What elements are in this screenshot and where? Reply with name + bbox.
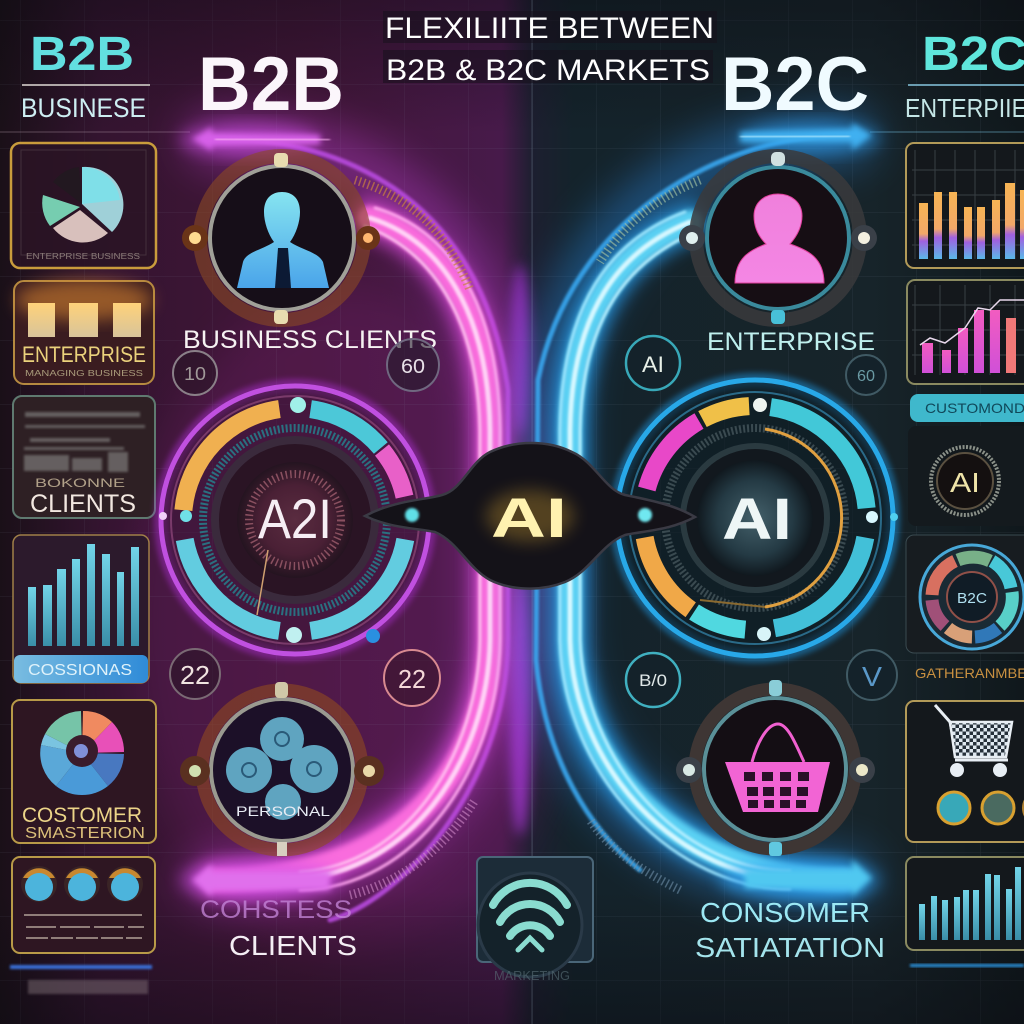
icons: four client circles: [226, 717, 338, 820]
badge: left bottom b: 22: [398, 664, 426, 694]
panel: thin bar chart: [906, 857, 1024, 950]
ring: basket: [676, 680, 875, 856]
badge: right top b: 60: [857, 368, 875, 385]
bottom-left streaks: [10, 965, 152, 994]
icon: pink basket: [725, 724, 830, 812]
icon: pink person: [735, 194, 824, 283]
ring: B2C AI gauge: [617, 380, 898, 656]
badge: left bottom a: [170, 649, 220, 699]
panel: AI badge: AI: [950, 467, 980, 498]
heading: B2B: B2B: [198, 42, 344, 127]
badge: right bottom b: V: [862, 661, 882, 692]
panel: enterprise cards: ENTERPRISE: [22, 342, 146, 367]
panel: bar chart: [13, 535, 149, 683]
badge: right top a: [626, 336, 680, 390]
panel: three indicators: [12, 857, 155, 953]
title: FLEXILIITE BETWEEN: [385, 12, 714, 45]
panel: donut dashboard: B2C: [957, 590, 987, 607]
panel: clients: BOKONNE: [35, 476, 125, 490]
label: AI: AI: [491, 486, 567, 549]
ring: business clients: [182, 153, 380, 324]
badge: left top a: [173, 351, 217, 395]
badge: right top a: AI: [642, 352, 664, 377]
icon: business person: [237, 192, 329, 288]
heading: B2C: B2C: [721, 42, 869, 127]
label: dashboard caption: GATHERANMBE: [915, 665, 1024, 681]
label: business clients: BUSINESS CLIENTS: [183, 326, 437, 354]
bottom-right streak: [910, 964, 1024, 967]
panel: customer satisfaction: [12, 700, 156, 843]
title: B2B & B2C MARKETS: [386, 54, 710, 87]
panel: B2C line and bar chart: [907, 280, 1024, 384]
label: clients: CLIENTS: [229, 930, 357, 961]
badge: left bottom b: [384, 650, 440, 706]
panel header: B2B business: B2B: [30, 28, 134, 81]
badge: right bottom a: [626, 653, 680, 707]
button: bar chart caption: [14, 655, 148, 683]
ring: enterprise person: [679, 152, 877, 324]
panel: enterprise cards: MANAGING BUSINESS: [25, 369, 143, 378]
ring: B2B AI gauge: A2I: [258, 487, 332, 550]
panel: pie chart: ENTERPRISE BUSINESS: [26, 252, 140, 261]
panel header: B2C enterprise: [905, 28, 1024, 123]
badge: right bottom b: [847, 650, 897, 700]
badge: right top b: [846, 355, 886, 395]
label: satiatation: SATIATATION: [695, 932, 885, 963]
badge: left bottom a: 22: [180, 660, 210, 690]
panel: pie chart: [11, 143, 156, 268]
icon: segmented wheel: [40, 711, 124, 795]
panel: donut dashboard: [906, 535, 1024, 653]
panel: wifi signal: [477, 857, 593, 983]
ring: personal group: [180, 682, 384, 856]
arc: B2B pink flow: [205, 139, 508, 920]
panel: customer satisfaction: COSTOMER: [22, 804, 142, 827]
panel: clients: [13, 396, 155, 518]
panel: AI badge: [908, 426, 1024, 526]
arrow: B2B top: [180, 124, 330, 156]
panel header: B2B business: [21, 28, 150, 123]
panel: wifi signal: MARKETING: [494, 968, 570, 983]
panel: customer satisfaction: SMASTERION: [25, 825, 145, 842]
badge: left top b: [387, 339, 439, 391]
icon: pie: [42, 167, 123, 243]
icon: wifi arcs: [493, 883, 567, 950]
badge: right bottom a: B/0: [639, 671, 667, 690]
panel: clients: CLIENTS: [30, 490, 136, 518]
arrow: B2B bottom: [180, 860, 340, 900]
panel: shopping cart: [906, 701, 1024, 842]
title: [383, 11, 717, 87]
AI connector hub: [365, 443, 695, 589]
arc: B2C blue flow: [536, 135, 855, 890]
panel: enterprise cards: [14, 280, 154, 384]
panel header: B2C enterprise: B2C: [922, 28, 1024, 81]
arrow: B2C top: [740, 122, 880, 154]
icon: cart: [935, 705, 1012, 777]
label: consumer clients faded: COHSTESS: [200, 896, 352, 924]
panel header: B2B business: BUSINESE: [21, 93, 146, 123]
ring: personal group: PERSONAL: [236, 803, 330, 819]
button: B2C customer: [910, 394, 1024, 422]
label: consumer: CONSOMER: [700, 897, 870, 928]
label: enterprise: ENTERPRISE: [707, 328, 875, 356]
button: B2C customer: CUSTOMOND: [925, 400, 1024, 416]
panel: B2C bar chart: [906, 143, 1024, 268]
badge: left top a: 10: [184, 364, 206, 384]
badge: left top b: 60: [401, 356, 425, 378]
button: bar chart caption: COSSIONAS: [28, 662, 132, 679]
arrow: B2C bottom: [720, 860, 880, 900]
ring: B2B AI gauge: [159, 386, 429, 654]
ring: B2C AI gauge: AI: [722, 487, 792, 552]
